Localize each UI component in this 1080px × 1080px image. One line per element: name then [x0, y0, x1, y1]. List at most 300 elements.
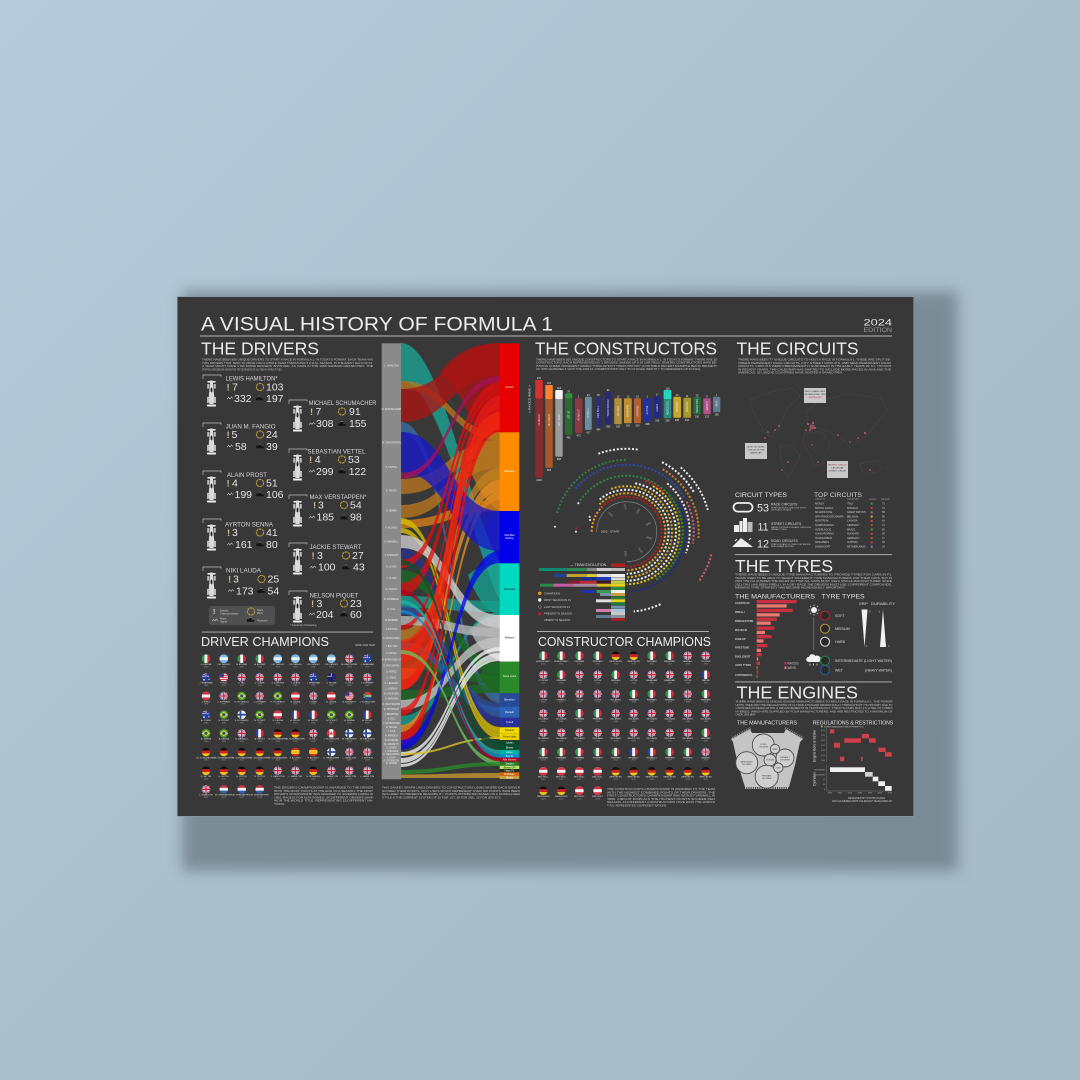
row: 1970s champions: N. LAUDA: [326, 700, 337, 703]
row: 2000s champions: 2006: [311, 760, 316, 762]
driver: Ayrton Senna: [203, 519, 278, 551]
bar labels: LOTUS: [568, 411, 570, 419]
row: 1960s constructors: [538, 670, 711, 684]
row: 1960s constructors: 1966: [649, 682, 655, 684]
poster: [177, 297, 914, 816]
row: 2020s constructors: [537, 786, 604, 800]
row: 2010s champions: [201, 766, 374, 780]
engine circle labels: FORD: [760, 744, 767, 746]
constructor champion flags: [536, 651, 712, 800]
row: 2010s constructors: RED BULL: [592, 777, 604, 779]
row: 2000s constructors: [538, 747, 711, 762]
row: 1980s champions: 1982: [239, 722, 245, 724]
top circuits table: 73: [882, 502, 885, 506]
bar labels: MARCH: [706, 401, 709, 411]
top circuits table: 58: [882, 511, 885, 514]
manufacturer labels: CONTINENTAL: [735, 674, 753, 677]
row: 2010s constructors: MERCEDES: [627, 777, 640, 779]
soft tyre: SOFT: [835, 614, 845, 618]
row: 1950s constructors: 1958: [685, 663, 691, 665]
row: 1980s champions: 1983: [257, 722, 263, 724]
engine block: [731, 728, 803, 788]
row: 1960s champions: 1963: [257, 685, 263, 687]
chart: constructor timeline spiral: [554, 449, 711, 611]
row: 2000s champions: [197, 747, 373, 762]
constructors championship note: THE CONSTRUCTOR'S CHAMPIONSHIP IS AWARDED TO THE TEAM: [607, 787, 715, 791]
row: 2010s constructors: MERCEDES: [699, 777, 712, 779]
row: 1960s constructors: 1969: [703, 682, 709, 684]
row: 2010s constructors: 2012: [577, 779, 583, 781]
row: 1980s constructors: 1983: [595, 721, 601, 723]
driver: Ayrton Senna: 3: [232, 527, 238, 539]
top circuits table: COUNTRY: [847, 498, 860, 501]
bar labels: BRABHAM: [627, 405, 630, 417]
row: 2000s constructors: BRAWN: [702, 756, 710, 759]
row: 1970s constructors: FERRARI: [629, 698, 639, 701]
sankey: driver labels: N. PIQUET: [386, 589, 398, 591]
bar labels: FERRARI: [538, 414, 541, 425]
row: 2020s constructors: 2020: [541, 798, 546, 800]
driver: Michael Schumacher: 308: [316, 418, 334, 430]
row: 1990s constructors: 1992: [577, 740, 583, 742]
driver: Jackie Stewart: 100: [318, 562, 336, 574]
sankey: constructor labels: Racing: [505, 536, 514, 540]
bar labels: 472: [577, 434, 581, 438]
bar labels: 320: [626, 424, 631, 428]
bar labels: WILLIAMS: [558, 414, 561, 426]
drivers intro text: [202, 358, 373, 371]
bar labels: 10: [627, 396, 630, 398]
row: 2000s champions: F. ALONSO: [308, 756, 319, 759]
row: 1970s constructors: FERRARI: [665, 698, 675, 701]
row: 1950s champions: 1958: [347, 666, 352, 668]
row: 1980s constructors: 1981: [559, 721, 564, 723]
tyre manufacturers chart: [735, 594, 816, 678]
driver: Michael Schumacher: 7: [316, 406, 322, 418]
clock face: 1960: [607, 511, 614, 518]
bar labels: 417: [586, 432, 591, 434]
map callout: americas: [745, 443, 767, 459]
row: 1980s constructors: McLAREN: [683, 718, 693, 721]
row: 1990s constructors: WILLIAMS: [646, 737, 657, 740]
bar labels: MERCEDES: [666, 401, 669, 415]
legend: champions key: NAME YEAR TEAM: [355, 643, 376, 647]
row: 1980s champions: A. JONES: [201, 719, 212, 722]
row: 2000s constructors: FERRARI: [575, 756, 585, 759]
row: 1990s champions: [201, 728, 375, 743]
bar labels: 808: [557, 458, 562, 461]
row: 1960s champions: J. BRABHAM: [199, 682, 213, 685]
sankey: constructor labels: Mercedes: [504, 587, 516, 591]
sankey: constructor labels: Matra: [506, 776, 513, 780]
grip and durability wedges: [859, 602, 896, 648]
row: 1950s champions: 1954: [275, 666, 281, 668]
driver: Juan M. Fangio: JUAN M. FANGIO: [226, 423, 276, 430]
driver: Nelson Piquet: 60: [350, 609, 362, 621]
row: 1950s constructors: 1954: [613, 663, 619, 665]
top circuits table: GREAT BRITAIN: [847, 511, 866, 514]
row: 2010s champions: 2011: [222, 778, 227, 780]
row: 2000s champions: M. SCHUMACHER: [197, 756, 216, 759]
row: 2010s champions: 2016: [311, 778, 316, 780]
sankey: driver labels: M. VERSTAPPEN: [382, 442, 401, 444]
sankey: constructor labels: [503, 385, 517, 780]
row: 2000s constructors: 2002: [577, 760, 583, 762]
row: 1950s champions: J.M. FANGIO: [307, 663, 320, 666]
row: 1950s constructors: 1956: [649, 663, 655, 665]
row: 1960s constructors: LOTUS: [594, 680, 602, 682]
driver: Juan M. Fangio: [203, 423, 278, 454]
row: 1980s champions: 1987: [329, 722, 334, 724]
row: 1990s champions: 1998: [347, 741, 352, 743]
row: 1950s champions: 1951: [222, 666, 227, 668]
row: 1970s champions: E. FITTIPALDI: [235, 700, 249, 703]
row: 1950s champions: 1953: [257, 666, 263, 668]
row: 1980s champions: N. PIQUET: [254, 720, 266, 722]
legend: turbo permitted: SUPERCHARGED/TURBOS PERMITTED: [824, 726, 864, 728]
row: 1960s champions: J. SURTEES: [271, 683, 285, 685]
sankey: constructor labels: Sauber: [505, 762, 514, 766]
row: 1950s champions: G. FARINA: [201, 663, 212, 666]
sankey: driver labels: E. IRVINE: [386, 763, 397, 765]
row: 2010s constructors: 2011: [559, 779, 564, 781]
map callout: oceania: LAS VEGAS: [831, 466, 844, 470]
tyre types: TYRE TYPES: [822, 594, 865, 600]
sankey: driver labels: A. JONES: [386, 746, 397, 750]
sankey: constructor labels: Aston: [506, 750, 513, 754]
row: 2010s constructors: MERCEDES: [681, 777, 694, 779]
driver: Alain Prost: 51: [266, 478, 278, 490]
driver: Sebastian Vettel: [289, 448, 366, 480]
sankey: driver labels: F. MASSA: [386, 652, 397, 655]
races and wins legend: [784, 662, 798, 670]
hard tyre: HARD: [835, 640, 846, 644]
drivers championship note: [274, 786, 374, 806]
bar labels: 116: [666, 387, 670, 390]
row: 1950s constructors: 1953: [595, 663, 601, 665]
bar labels: 23: [587, 394, 590, 397]
row: 1990s champions: J. VILLENEUVE: [323, 739, 340, 741]
constructors championship note: 1958. CIRCUIT DISPLAYS THE HIGHEST POINTS SCORER PER: [607, 797, 716, 801]
engine circle labels: TAG: [776, 766, 781, 770]
manufacturer labels: BRIDGESTONE: [735, 620, 754, 623]
row: 1990s constructors: 1998: [685, 740, 691, 742]
street circuit count: STREET CIRCUITS: [771, 522, 802, 526]
row: 2010s champions: 2018: [347, 778, 352, 780]
top circuits table: SILVERSTONE: [815, 511, 833, 514]
row: 1990s champions: 1992: [239, 741, 245, 743]
row: 1980s champions: 1989: [365, 722, 370, 724]
driver: Lewis Hamilton: 103: [266, 382, 284, 394]
row: 2010s champions: L. HAMILTON: [289, 775, 303, 778]
row: 1950s constructors: 1955: [631, 663, 637, 665]
row: 1960s champions: D. HULME: [326, 683, 337, 685]
row: 1960s constructors: 1965: [631, 682, 637, 684]
row: 2000s champions: 2007: [329, 760, 334, 762]
sankey: driver labels: R. PATRESE: [385, 739, 399, 742]
row: 1980s champions: N. PIQUET: [326, 720, 337, 722]
row: 1960s constructors: BRABHAM: [664, 679, 675, 682]
grip and durability wedges: 3: [888, 644, 890, 648]
bar labels: HAAS: [716, 400, 718, 407]
sankey: driver labels: F. ALONSO: [385, 526, 398, 530]
driver: Ayrton Senna: AYRTON SENNA: [225, 522, 274, 529]
row: 1960s champions: J. CLARK: [291, 682, 301, 685]
row: 1960s champions: P. HILL: [220, 683, 228, 685]
row: 1950s constructors: FERRARI: [575, 660, 585, 663]
row: 1990s constructors: WILLIAMS: [610, 737, 621, 740]
drivers championship note: WON THE WORLD TITLE, REPRESENTING 15 DIFFERENT NA-: [274, 799, 373, 803]
row: 2010s constructors: 2017: [667, 779, 673, 781]
engine circle labels: 245 WINS: [762, 778, 772, 780]
driver: Jackie Stewart: JACKIE STEWART: [310, 544, 362, 551]
top circuits table: SPA-FRANCORCHAMPS: [815, 515, 844, 518]
grip and durability wedges: GRIP: [859, 602, 868, 606]
row: 2000s constructors: 2009: [703, 760, 709, 762]
intermediate tyre: INTERMEDIATE (LIGHT WATER): [835, 659, 892, 663]
row: 2000s constructors: 2000: [541, 760, 546, 762]
axis tick labels: 1970: [848, 792, 853, 794]
row: 2020s champions: M. VERSTAPPEN: [215, 794, 233, 797]
row: 1960s champions: 1966: [311, 685, 316, 687]
sankey: driver labels: C. REUTEMANN: [383, 703, 400, 706]
row: 1970s constructors: 1972: [577, 702, 583, 704]
top circuits table: MONTREAL: [815, 520, 830, 523]
row: 1960s constructors: FERRARI: [611, 679, 621, 682]
driver: Jackie Stewart: !: [312, 551, 315, 562]
axes: [827, 728, 892, 791]
row: 1960s champions: G. HILL: [346, 683, 354, 685]
row: 2020s champions: L. HAMILTON: [199, 794, 213, 797]
row: 1970s constructors: LOTUS: [684, 699, 692, 701]
regulations and restrictions chart: REGULATIONS & RESTRICTIONS: [813, 720, 894, 726]
bar labels: [536, 377, 719, 482]
sankey: driver labels: M. ANDRETTI: [384, 743, 399, 746]
row: 2000s constructors: FERRARI: [538, 756, 548, 759]
row: 1970s constructors: 1978: [685, 702, 691, 704]
row: 1990s champions: 1991: [222, 741, 227, 743]
bar labels: 259: [665, 420, 670, 422]
driver: Lewis Hamilton: LEWIS HAMILTON*: [226, 376, 278, 383]
wet tyre: [820, 666, 892, 674]
row: 1960s champions: 1961: [222, 685, 227, 687]
row: 1990s constructors: 1999: [703, 740, 709, 742]
row: 1990s champions: 1997: [329, 741, 334, 743]
driver: Max Verstappen: 3: [318, 500, 324, 512]
row: 1960s champions: G. HILL: [238, 683, 246, 685]
clock face: 2000: [646, 535, 653, 541]
row: 1980s champions: A. PROST: [362, 719, 373, 722]
row: 2000s constructors: 2005: [631, 760, 637, 762]
bar labels: 963: [547, 469, 552, 472]
drivers legend: Drivers: [220, 608, 229, 612]
heading: the drivers: THE DRIVERS: [201, 338, 319, 358]
row: 1990s champions: N. MANSELL: [235, 738, 249, 741]
row: 1990s champions: 1995: [293, 741, 299, 743]
row: 2000s champions: 2000: [204, 760, 209, 762]
bar labels: 10: [636, 396, 639, 398]
road circuit count: NON-URBAN ROUTES: [771, 545, 795, 548]
y axis titles: Engine Bore & Stroke: [812, 730, 816, 762]
row: 1960s champions: 1960: [204, 685, 209, 687]
row: 1960s constructors: FERRARI: [556, 679, 566, 682]
row: 1970s constructors: 1979: [703, 702, 709, 704]
drivers legend: Race: [220, 616, 227, 620]
sankey note: [382, 786, 521, 799]
top circuits table: 70: [882, 507, 885, 510]
row: 2000s champions: M. SCHUMACHER: [232, 756, 251, 759]
row: 2010s champions: L. HAMILTON: [361, 775, 374, 778]
grip and durability wedges: 1: [866, 644, 868, 648]
row: 1980s constructors: 1980: [541, 721, 546, 723]
row: 1960s champions: 1967: [329, 685, 334, 687]
row: 2010s champions: 2012: [239, 778, 245, 780]
row: 1980s constructors: FERRARI: [575, 718, 585, 721]
row: 1970s champions: J. STEWART: [253, 700, 267, 703]
row: 2000s champions: 2009: [365, 760, 370, 762]
row: 1950s champions: 1955: [293, 666, 299, 668]
circuits intro text: [738, 358, 892, 375]
grip and durability wedges: 1: [878, 610, 880, 614]
drivers legend: Championships: [220, 612, 239, 616]
row: 1990s constructors: McLAREN: [683, 737, 693, 740]
row: 1950s constructors: VANWALL: [683, 660, 694, 663]
bar labels: 79: [567, 390, 571, 394]
row: 2000s constructors: 2001: [559, 760, 564, 762]
bar labels: 230: [695, 416, 700, 418]
sankey: constructor labels: Toro R.: [505, 754, 514, 758]
drivers legend: Race: [257, 608, 264, 612]
sankey: constructor labels: Benetton: [504, 698, 515, 702]
driver: Alain Prost: 199: [234, 489, 252, 501]
engine circle labels: FERRARI: [762, 774, 772, 778]
row: 1950s constructors: 1950: [541, 663, 546, 665]
driver: Nelson Piquet: !: [311, 599, 314, 610]
driver: Juan M. Fangio: !: [226, 430, 230, 441]
y axis titles: Cylinders: [812, 772, 816, 786]
row: 1970s constructors: LOTUS: [594, 699, 602, 701]
sankey: driver labels: D. HILL: [388, 609, 396, 611]
row: 1980s constructors: McLAREN: [611, 718, 621, 721]
panel: the drivers: [201, 338, 377, 627]
row: 1950s champions: J.M. FANGIO: [271, 663, 284, 666]
row: 1980s constructors: WILLIAMS: [556, 718, 567, 721]
sankey: driver labels: D. HULME: [386, 727, 397, 729]
top circuits table: GERMANY: [847, 524, 860, 527]
row: 2020s champions: [199, 784, 269, 799]
row: 1970s constructors: McLAREN: [611, 698, 621, 701]
engine manufacturer circles: [736, 734, 794, 788]
row: 1990s constructors: WILLIAMS: [592, 737, 603, 740]
tyres intro text: 2011 THIS HAS BEEN PIRELLI. IN A DRY RACE THE DRIVERS MUST USE 2 DIFFERENT COMPOUNDS,: [735, 582, 892, 586]
row: 1980s champions: A. PROST: [308, 719, 319, 722]
row: 2020s champions: M. VERSTAPPEN: [251, 794, 269, 797]
driver: Niki Lauda: 3: [233, 574, 239, 586]
row: 1960s constructors: 1964: [613, 682, 619, 684]
sankey: driver labels: S. PEREZ: [386, 672, 397, 674]
heading: the engines: THE ENGINES: [736, 682, 858, 702]
row: 1970s champions: 1975: [293, 704, 299, 706]
row: 1980s champions: 1986: [311, 722, 316, 724]
row: 1950s constructors: [536, 651, 711, 665]
row: 2010s champions: 2010: [204, 778, 209, 780]
edition badge: [864, 317, 892, 334]
drivers legend: Wins: [257, 611, 264, 615]
driver: Michael Schumacher: MICHAEL SCHUMACHER: [309, 400, 377, 407]
credits: DATA GATHERED FROM THE ERGAST DEVELOPER API: [832, 799, 892, 803]
row: 1980s constructors: 1989: [703, 721, 709, 723]
driver: Jackie Stewart: 3: [317, 550, 323, 562]
regulations and restrictions chart: [812, 720, 894, 794]
bar labels: 248: [675, 419, 680, 422]
bar labels: 198: [715, 414, 719, 416]
row: 1970s champions: 1979: [365, 704, 370, 706]
first season markers: [554, 502, 591, 533]
row: 1990s constructors: WILLIAMS: [664, 737, 675, 740]
row: 1950s champions: M. HAWTHORN: [341, 663, 358, 666]
axis tick labels: 1.6L: [821, 760, 826, 762]
row: 1970s champions: 1974: [275, 704, 281, 706]
row: 1980s constructors: McLAREN: [629, 718, 639, 721]
map callout: monaco: SILVERSTONE, 1950: [804, 394, 826, 396]
row: 1980s champions: 1984: [275, 722, 281, 724]
sankey: driver labels: R. BARRICHELLO: [382, 658, 401, 662]
edition badge: EDITION: [864, 328, 892, 334]
heading: the tyres: THE TYRES: [735, 556, 833, 576]
driver: Sebastian Vettel: !: [309, 455, 312, 466]
sankey: constructor labels: Brawn GP: [504, 765, 516, 769]
row: 2010s champions: S. VETTEL: [236, 776, 248, 778]
bar labels: 243: [537, 377, 542, 380]
map callout: monaco: FIRST GRAND PRIX: [805, 390, 826, 393]
constructors intro text: GP WHO ENTERED & WON THE 2009 F1 CHAMPIONSHIP ONLY TO CHANGE IDENTITY TO MERCEDES GP IN 2010).: [536, 367, 701, 371]
bar labels: 114: [557, 387, 562, 390]
panel: the engines: [731, 682, 894, 803]
row: 1980s constructors: WILLIAMS: [664, 718, 675, 721]
axis label: races and wins: < RACES WINS >: [528, 385, 532, 413]
driver: Jackie Stewart: [289, 543, 365, 574]
row: 1980s constructors: WILLIAMS: [538, 718, 549, 721]
bar labels: LIGIER: [656, 404, 659, 412]
circuits intro text: IN RECENT YEARS, THE CALENDAR HAS SHIFTED TO INCLUDE MORE RACES IN ASIA AND THE: [738, 367, 891, 371]
axis tick labels: 4.5L: [821, 730, 826, 732]
sankey: constructor bars: [500, 343, 519, 779]
tyres intro text: THERE HAVE BEEN 9 UNIQUE TYRE MANUFACTURERS TO PROVIDE TYRES FOR CARS IN F1.: [735, 572, 892, 576]
row: 1950s constructors: MASERATI: [664, 660, 676, 663]
row: 1950s champions: J. BRABHAM: [361, 663, 374, 666]
top circuits table: HUNGARORING: [815, 533, 834, 536]
row: 1990s constructors: BENETTON: [628, 738, 640, 740]
driver: Lewis Hamilton: !: [226, 382, 230, 394]
sankey: constructor labels: Brabham: [504, 772, 515, 776]
engine manufacturers diagram: [731, 720, 803, 788]
driver: Juan M. Fangio: 39: [266, 441, 278, 453]
row: 2000s constructors: RENAULT: [629, 756, 639, 759]
bar labels: ALPINE: [646, 405, 649, 414]
row: 1960s champions: J. CLARK: [255, 682, 265, 685]
row: 2010s constructors: 2018: [685, 779, 691, 781]
sankey: driver labels: N. MANSELL: [385, 540, 399, 544]
bar labels: 215: [705, 416, 710, 418]
driver: Max Verstappen: 54: [350, 500, 362, 512]
axis tick labels: 1990: [868, 792, 873, 794]
row: 1980s champions: N. LAUDA: [273, 719, 283, 722]
row: 1970s champions: 1972: [239, 704, 245, 706]
races and wins legend: RACES: [788, 662, 798, 666]
row: 1960s champions: 1965: [293, 685, 299, 687]
top circuits table: NETHERLANDS: [847, 546, 866, 548]
row: 1960s constructors: 1963: [595, 682, 601, 684]
